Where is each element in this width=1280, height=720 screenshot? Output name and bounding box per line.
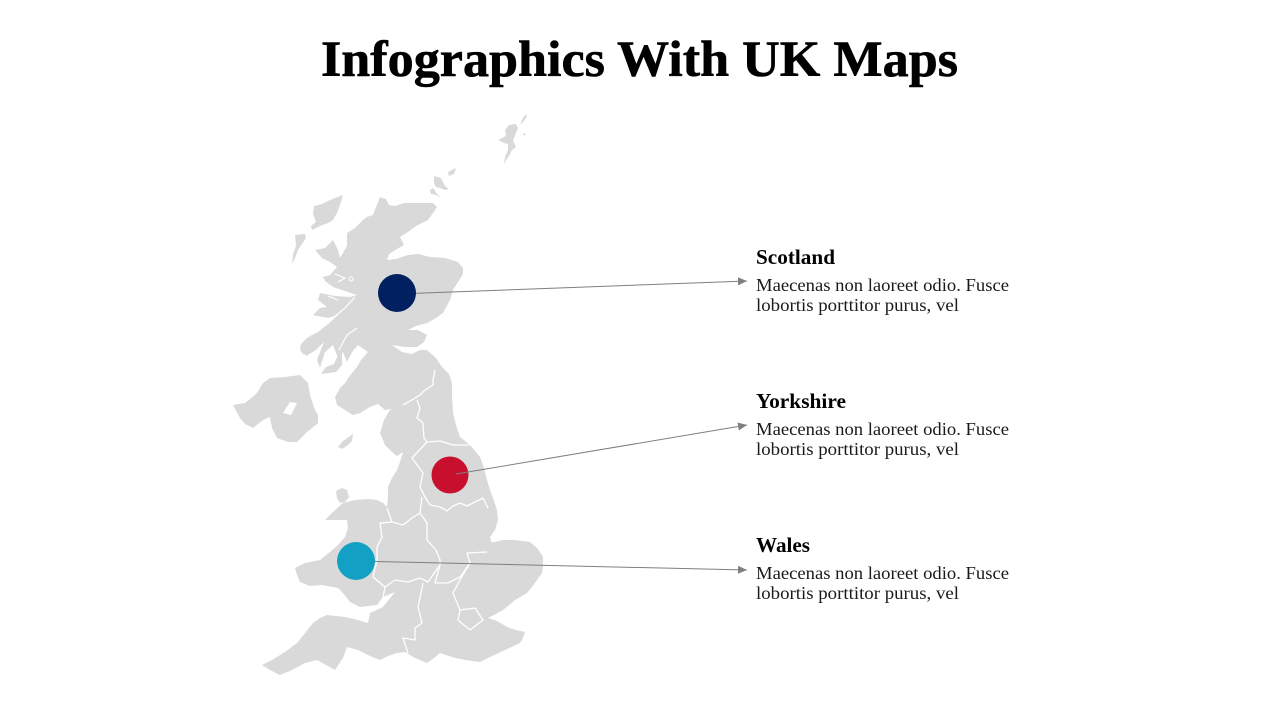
map: regional borders [373,370,488,653]
map: Shetland [498,114,527,165]
callout: Scotland [378,245,1009,315]
arrow: Yorkshire [456,425,747,474]
callout: Yorkshire [432,389,1009,494]
text: Yorkshire: lobortis porttitor purus, vel [756,439,959,459]
text: Wales: Maecenas non laoreet odio. Fusce [756,563,1009,583]
map: Orkney [430,168,456,198]
text: Scotland: lobortis porttitor purus, vel [756,295,959,315]
text: Wales: lobortis porttitor purus, vel [756,583,959,603]
UK map [233,114,543,675]
marker: Scotland [378,274,416,312]
map: Isle of Man [338,434,353,449]
map: Anglesey [336,488,349,503]
text: Yorkshire: Maecenas non laoreet odio. Fusce [756,419,1009,439]
marker: Wales [337,542,375,580]
title: Infographics With UK Maps [321,32,958,88]
map: Lewis and Harris [311,195,343,230]
map: Great Britain mainland [262,197,543,675]
heading: Wales: Wales [756,533,810,557]
map: Uist [292,234,306,264]
arrow: Wales [356,561,747,570]
callout: Wales [337,533,1009,603]
arrow: Scotland [397,281,747,294]
map: sea lochs [328,274,357,350]
heading: Yorkshire: Yorkshire [756,389,846,413]
text: Scotland: Maecenas non laoreet odio. Fusce [756,275,1009,295]
heading: Scotland: Scotland [756,245,835,269]
map: Northern Ireland [233,375,318,442]
marker: Yorkshire [432,456,468,494]
map: Mull and Jura islands [300,324,328,355]
